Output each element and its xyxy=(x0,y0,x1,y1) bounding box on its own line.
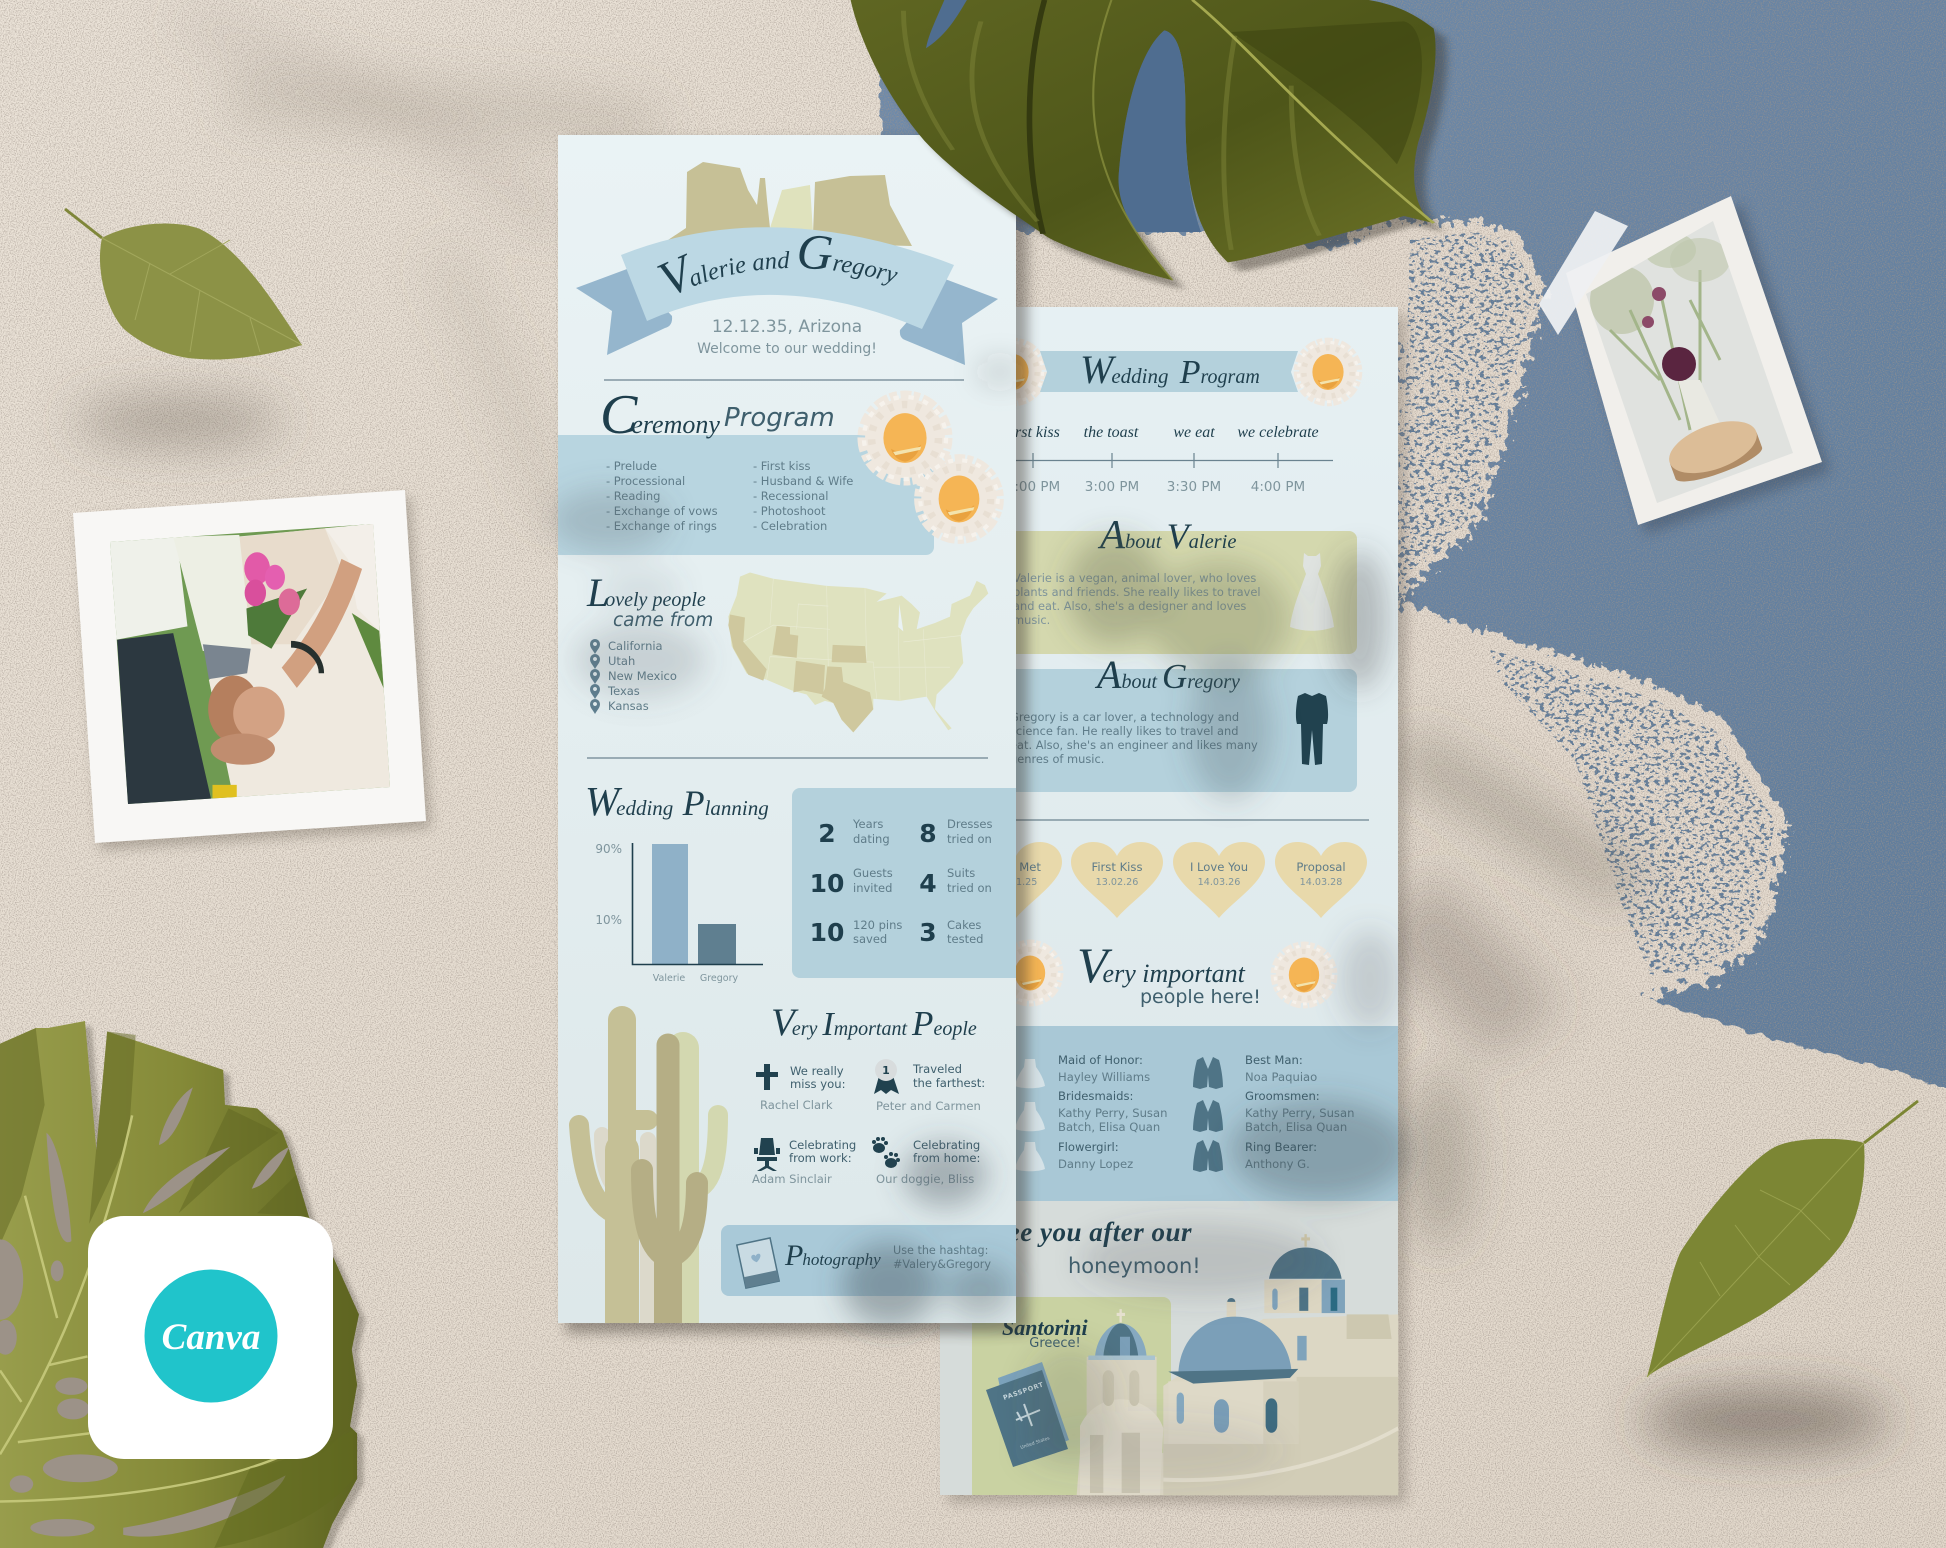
state list: California xyxy=(608,639,663,653)
heading: see you after our honeymoon: honeymoon! xyxy=(1068,1254,1201,1278)
panel: wedding party: Noa Paquiao xyxy=(1245,1070,1317,1084)
panel: stats: 3 xyxy=(919,918,937,947)
text: Santorini Greece: Greece! xyxy=(1029,1336,1081,1351)
panel: stats: tried on xyxy=(947,832,992,846)
love timeline hearts: 14.03.28 xyxy=(1300,877,1342,888)
upper church xyxy=(1264,1280,1345,1313)
panel: stats: tried on xyxy=(947,881,992,895)
logo: Canva badge: Canva xyxy=(162,1317,260,1358)
love timeline hearts: Proposal xyxy=(1296,860,1346,874)
timeline: we eat xyxy=(1173,424,1215,441)
icon: office chair xyxy=(754,1138,780,1171)
shadows over cards xyxy=(550,360,1410,1480)
love timeline hearts: First Kiss xyxy=(1092,860,1142,874)
heading: lovely people came from xyxy=(586,570,713,631)
paint stipple right xyxy=(1398,600,1788,1000)
map: USA xyxy=(728,572,988,732)
VIP: we really miss you: Rachel Clark xyxy=(760,1098,833,1112)
icon: tuxedo xyxy=(1296,693,1328,765)
card: main program (front) xyxy=(558,134,1036,1340)
ribbon heading xyxy=(1040,347,1298,392)
land xyxy=(1077,1314,1398,1495)
timeline: we celebrate xyxy=(1237,424,1319,441)
bar chart: Valerie xyxy=(653,973,685,984)
panel: wedding party: Bridesmaids: xyxy=(1058,1089,1133,1103)
heading: very important people here: people here! xyxy=(1140,986,1261,1008)
photo: couple holding hands xyxy=(73,490,431,850)
leaf: lower right xyxy=(1647,1101,1918,1377)
banner xyxy=(576,227,998,365)
VIP: we really miss you: We really xyxy=(790,1064,844,1078)
passport xyxy=(986,1362,1069,1467)
green travel panel xyxy=(972,1297,1171,1495)
panel: wedding party xyxy=(940,1026,1398,1201)
panel: ceremony program xyxy=(558,384,1000,555)
panel: stats: Years xyxy=(852,817,883,831)
panel: wedding party: Kathy Perry, Susan xyxy=(1058,1106,1167,1120)
love timeline hearts: First Met xyxy=(991,860,1041,874)
panel: stats: 8 xyxy=(919,819,937,848)
panel: stats: 120 pins xyxy=(853,918,902,932)
panel: stats: Dresses xyxy=(947,817,992,831)
panel: stats: saved xyxy=(853,932,887,946)
VIP: traveled the farthest: the farthest: xyxy=(913,1076,985,1090)
panel: wedding party: Batch, Elisa Quan xyxy=(1245,1120,1347,1134)
panel: wedding party: Ring Bearer: xyxy=(1245,1140,1317,1154)
panel: ceremony program: - Photoshoot xyxy=(753,504,826,518)
panel: stats: 10 xyxy=(810,869,844,898)
Santorini illustration xyxy=(972,1217,1398,1495)
icon: paws xyxy=(872,1137,900,1168)
photo: flower vase xyxy=(1539,196,1830,534)
panel: about Gregory xyxy=(940,652,1357,792)
VIP: celebrating from work: Adam Sinclair xyxy=(752,1172,832,1186)
flower left of ribbon xyxy=(982,341,1044,403)
flowers xyxy=(862,395,948,481)
leaf: top monstera xyxy=(851,0,1447,290)
bar chart: 90% xyxy=(595,842,622,856)
panel: wedding party: Anthony G. xyxy=(1245,1157,1310,1171)
panel: wedding party: Hayley Williams xyxy=(1058,1070,1150,1084)
panel: stats: dating xyxy=(853,832,890,846)
blue paint brush area xyxy=(880,0,1946,1092)
heading: very important people: Very Important People xyxy=(771,1001,977,1044)
panel: ceremony program: - First kiss xyxy=(753,459,811,473)
panel: ceremony program: - Exchange of rings xyxy=(606,519,717,533)
panel: about Gregory: science fan. He really likes to travel and xyxy=(1010,724,1238,738)
panel: photography hashtag: Photography xyxy=(784,1239,881,1272)
text: Santorini Greece: Santorini xyxy=(1002,1315,1088,1340)
panel: ceremony program: - Husband & Wife xyxy=(753,474,853,488)
panel: ceremony program: - Celebration xyxy=(753,519,827,533)
bar chart xyxy=(595,842,763,984)
panel: about Valerie: About Valerie xyxy=(1097,511,1236,557)
text: Santorini Greece xyxy=(1002,1315,1088,1351)
panel: photography hashtag xyxy=(721,1225,1016,1296)
mesa silhouette xyxy=(668,162,912,246)
love timeline hearts xyxy=(970,842,1367,918)
card: wedding program (back) xyxy=(940,307,1406,1503)
flowers beside very important heading xyxy=(1000,943,1334,1005)
timeline: 2:00 PM xyxy=(1006,479,1060,495)
VIP: celebrating from work: from work: xyxy=(789,1151,852,1165)
panel: stats: Guests xyxy=(853,866,893,880)
illustration: cacti xyxy=(579,1020,718,1340)
timeline xyxy=(950,424,1333,495)
panel: about Gregory: eat. Also, she's an engineer and likes many xyxy=(1010,738,1258,752)
VIP: celebrating from work xyxy=(752,1138,856,1186)
panel: about Valerie xyxy=(940,511,1357,654)
flower right of ribbon xyxy=(1297,341,1359,403)
heading: see you after our honeymoon xyxy=(992,1217,1201,1278)
VIP: celebrating from home: Our doggie, Bliss xyxy=(876,1172,974,1186)
heading: lovely people came from: Lovely people xyxy=(586,570,706,615)
VIP: we really miss you: miss you: xyxy=(790,1077,846,1091)
VIP: we really miss you xyxy=(756,1064,846,1112)
love timeline hearts: 14.03.26 xyxy=(1198,877,1240,888)
panel: ceremony program: - Processional xyxy=(606,474,685,488)
panel: stats: 10 xyxy=(810,918,844,947)
panel: stats: invited xyxy=(853,881,892,895)
panel: about Valerie: music. xyxy=(1013,613,1050,627)
panel: wedding party: Batch, Elisa Quan xyxy=(1058,1120,1160,1134)
leaf: upper left xyxy=(65,209,302,360)
panel: wedding party: Best Man: xyxy=(1245,1053,1303,1067)
VIP: traveled the farthest: Peter and Carmen xyxy=(876,1099,981,1113)
panel: stats: 2 xyxy=(818,819,836,848)
heading: see you after our honeymoon: See you after our xyxy=(992,1217,1192,1247)
panel: about Valerie: plants and friends. She really likes to travel xyxy=(1013,585,1261,599)
title: Valerie and Gregory xyxy=(657,236,898,293)
ribbon heading: Wedding Program xyxy=(1080,347,1260,392)
panel: wedding party: Groomsmen: xyxy=(1245,1089,1320,1103)
paint stipple top xyxy=(1334,221,1545,600)
tape xyxy=(1539,211,1628,335)
panel: ceremony program: - Recessional xyxy=(753,489,828,503)
panel: about Gregory: About Gregory xyxy=(1094,652,1240,697)
big blue dome church xyxy=(1168,1381,1298,1444)
heading: very important people here: Very important xyxy=(1077,937,1246,993)
panel: stats: tested xyxy=(947,932,983,946)
panel: ceremony program: - Prelude xyxy=(606,459,657,473)
panel: photography hashtag: Use the hashtag: xyxy=(893,1244,988,1257)
VIP: celebrating from home xyxy=(872,1137,980,1186)
icon: dress xyxy=(1290,553,1334,631)
panel: wedding party: Danny Lopez xyxy=(1058,1157,1133,1171)
love timeline hearts: 13.02.26 xyxy=(1096,877,1138,888)
state list: Texas xyxy=(607,684,640,698)
panel: wedding party: Kathy Perry, Susan xyxy=(1245,1106,1354,1120)
panel: stats xyxy=(792,788,1016,978)
small church xyxy=(1087,1357,1157,1437)
state list: New Mexico xyxy=(608,669,677,683)
VIP: traveled the farthest xyxy=(874,1059,985,1113)
timeline: 3:30 PM xyxy=(1167,479,1221,495)
state list: Utah xyxy=(608,654,635,668)
bar chart: 10% xyxy=(595,913,622,927)
timeline: 3:00 PM xyxy=(1085,479,1139,495)
panel: ceremony program: - Exchange of vows xyxy=(606,504,718,518)
panel: ceremony program: Ceremony xyxy=(600,384,720,446)
panel: ceremony program: Program xyxy=(724,403,835,433)
love timeline hearts: 12.01.25 xyxy=(995,877,1037,888)
panel: photography hashtag: #Valery&Gregory xyxy=(893,1258,991,1271)
icon: cross xyxy=(756,1064,778,1090)
date and welcome xyxy=(697,317,877,357)
panel: wedding party: Flowergirl: xyxy=(1058,1140,1119,1154)
passport: United States xyxy=(1020,1435,1051,1451)
panel: about Valerie: Valerie is a vegan, animal lover, who loves xyxy=(1013,571,1256,585)
bar chart: Gregory xyxy=(700,973,739,984)
state list: Kansas xyxy=(608,699,649,713)
heading: lovely people came from: came from xyxy=(613,610,713,631)
icon: medal: 1 xyxy=(882,1064,890,1077)
timeline: 4:00 PM xyxy=(1251,479,1305,495)
timeline: the toast xyxy=(1084,424,1139,441)
VIP: celebrating from work: Celebrating xyxy=(789,1138,856,1152)
leaf holes xyxy=(1118,30,1201,232)
icon: polaroid xyxy=(737,1238,779,1288)
panel: about Valerie: and eat. Also, she's a designer and loves xyxy=(1013,599,1246,613)
panel: about Gregory: genres of music. xyxy=(1010,752,1104,766)
logo: Canva badge xyxy=(88,1216,333,1459)
date and welcome: 12.12.35, Arizona xyxy=(712,317,862,337)
state list xyxy=(590,639,677,714)
panel: stats: 4 xyxy=(919,869,937,898)
heading: wedding planning: Wedding Planning xyxy=(585,778,769,824)
passport: PASSPORT xyxy=(1002,1380,1045,1402)
VIP: celebrating from home: from home: xyxy=(913,1151,980,1165)
leaf: lower left monstera xyxy=(0,1021,365,1548)
date and welcome: Welcome to our wedding! xyxy=(697,341,877,357)
VIP: traveled the farthest: Traveled xyxy=(912,1062,962,1076)
VIP: celebrating from home: Celebrating xyxy=(913,1138,980,1152)
panel: about Gregory: Gregory is a car lover, a technology and xyxy=(1010,710,1239,724)
love timeline hearts: I Love You xyxy=(1190,860,1248,874)
panel: ceremony program: - Reading xyxy=(606,489,660,503)
timeline: first kiss xyxy=(1006,424,1060,441)
panel: stats: Cakes xyxy=(947,918,981,932)
panel: wedding party: Maid of Honor: xyxy=(1058,1053,1143,1067)
panel: stats: Suits xyxy=(947,866,975,880)
